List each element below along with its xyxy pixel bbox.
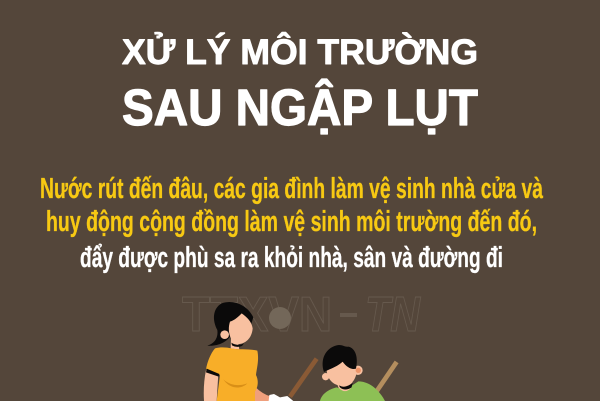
arm left <box>204 370 218 401</box>
shirt fold <box>223 379 247 387</box>
ears <box>322 373 329 380</box>
neck <box>336 380 353 391</box>
intro text block <box>40 173 544 274</box>
title <box>122 32 478 136</box>
collar <box>231 343 244 347</box>
arm right <box>254 387 272 401</box>
yellow shirt <box>206 347 258 401</box>
broom handle: boy <box>370 362 397 401</box>
glove <box>269 394 293 401</box>
broom handle: woman <box>290 359 317 397</box>
hair <box>207 302 253 346</box>
face <box>327 362 357 386</box>
sleeve band <box>206 369 219 377</box>
illustration: woman and boy cleaning <box>204 302 397 401</box>
ear <box>220 330 229 339</box>
watermark: TTXVN <box>182 288 332 342</box>
watermark <box>182 288 421 342</box>
collar <box>339 383 353 389</box>
boy figure <box>320 345 385 401</box>
title: XỬ LÝ MÔI TRƯỜNG <box>122 32 478 72</box>
hair <box>323 345 357 372</box>
green shirt <box>320 381 385 401</box>
watermark: TN <box>365 288 421 342</box>
face and neck <box>229 313 253 349</box>
woman figure <box>204 302 293 401</box>
title: SAU NGẬP LỤT <box>122 78 478 136</box>
